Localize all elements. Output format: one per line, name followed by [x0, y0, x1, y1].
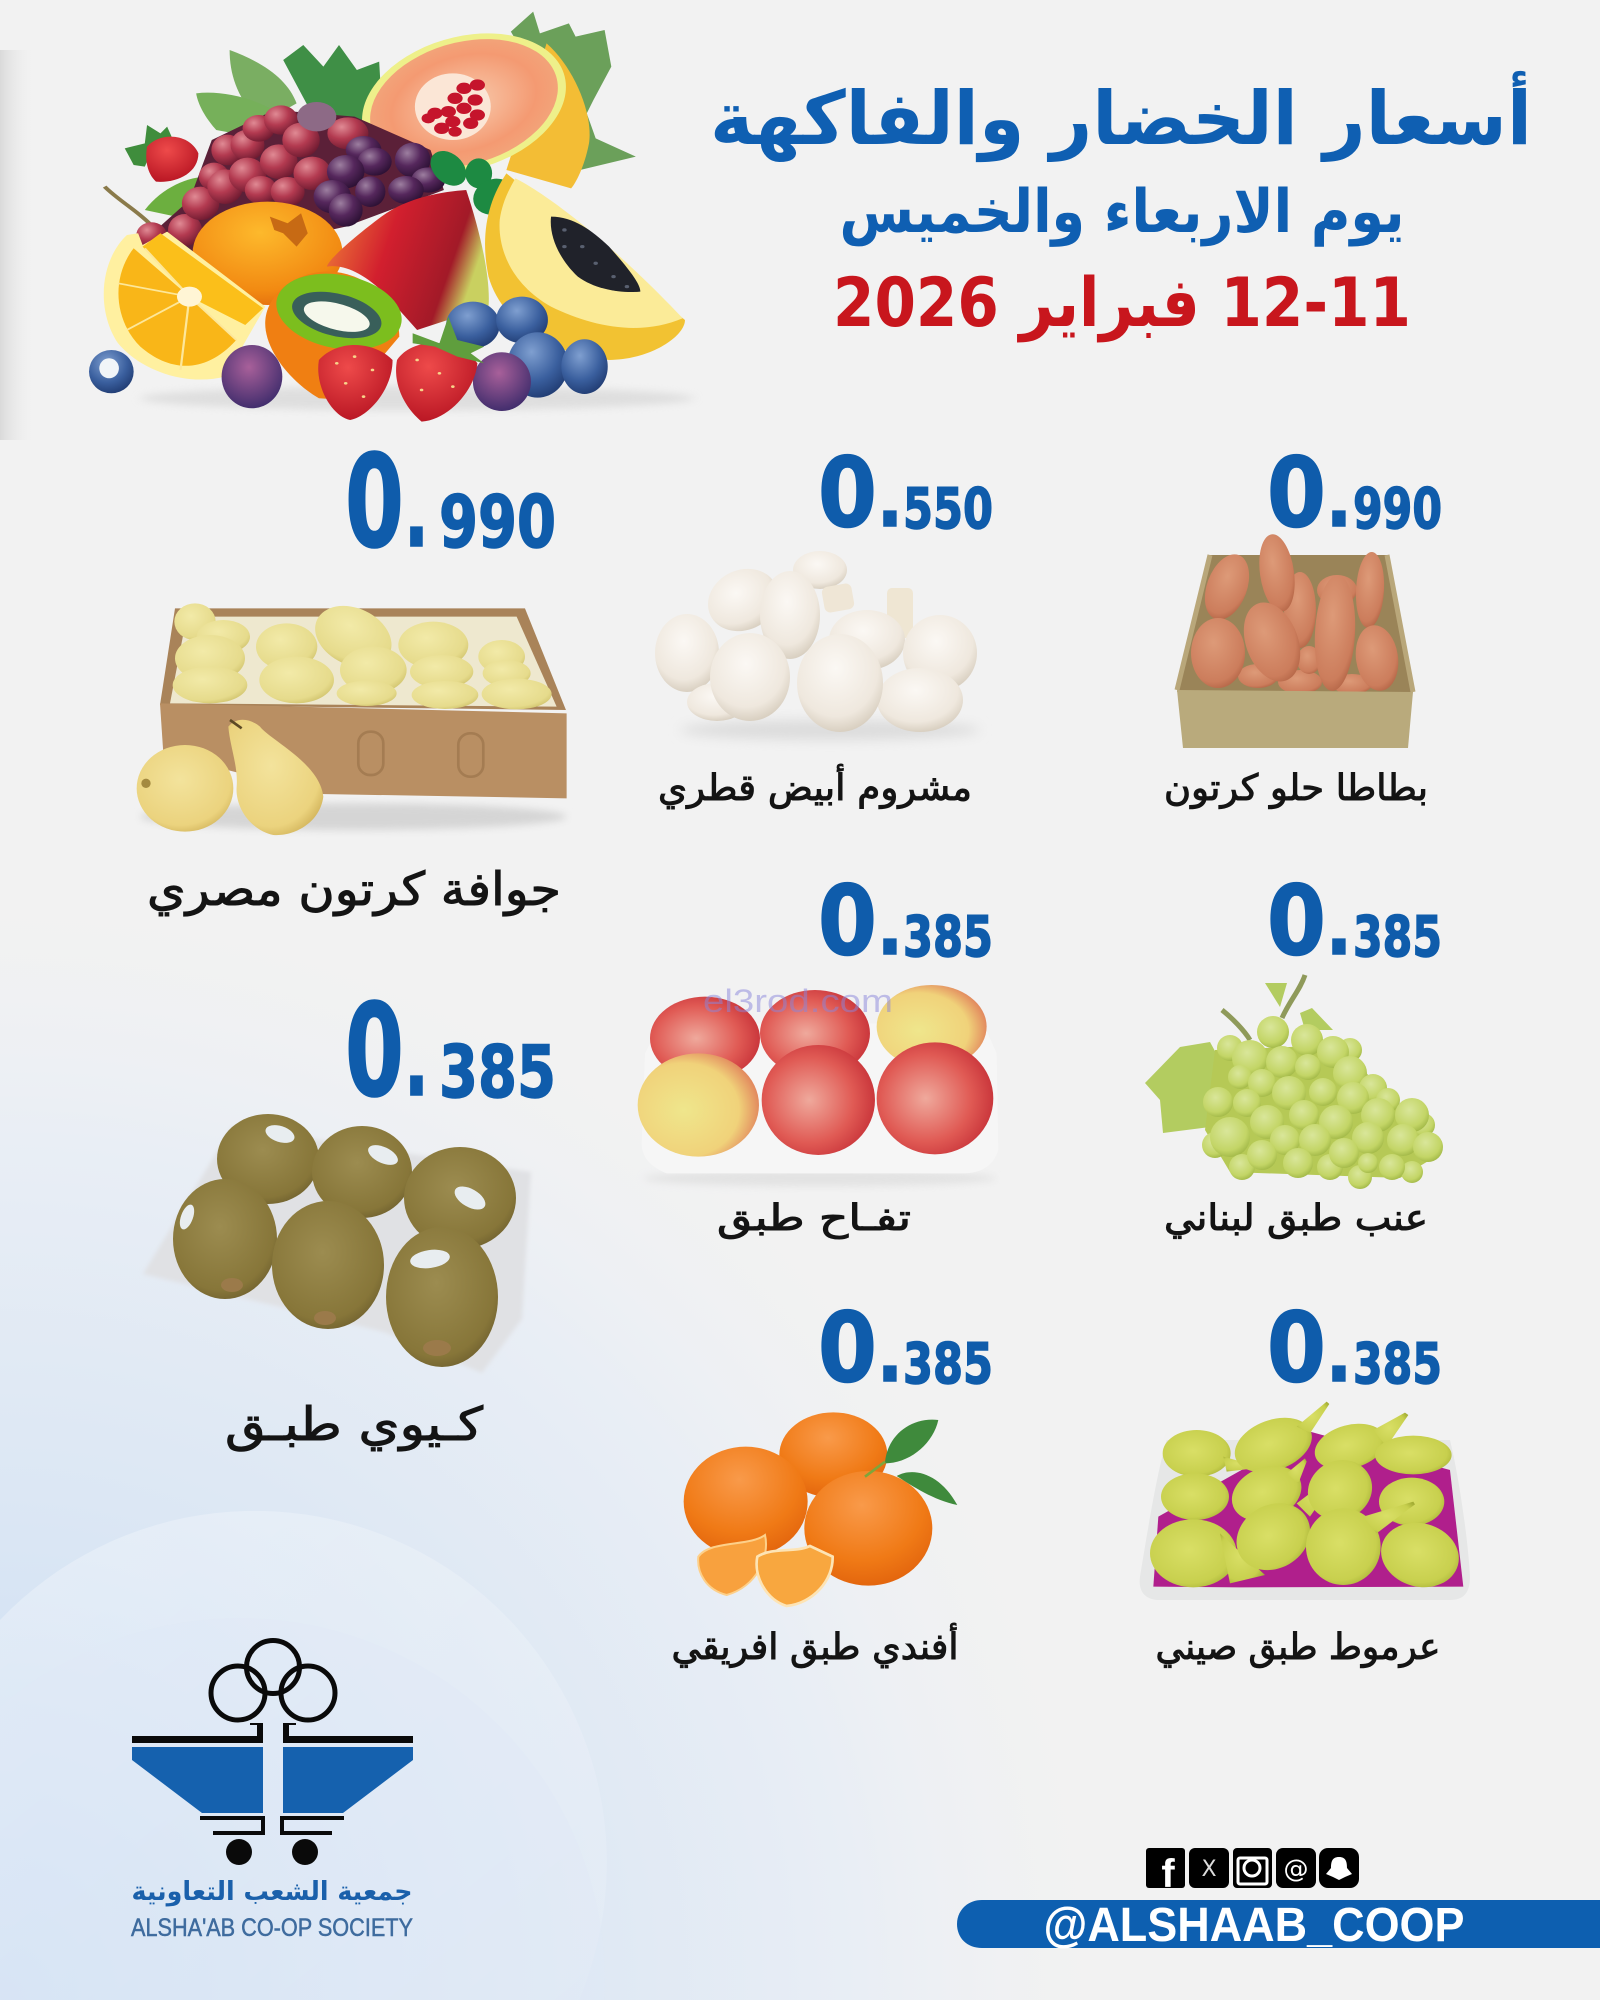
price: 0.385: 0.	[1267, 1292, 1352, 1404]
icon: x: X	[1201, 1857, 1217, 1882]
icon: red pear	[327, 190, 489, 330]
price: 0.385: 385	[439, 1030, 556, 1114]
image: pears on tray	[1140, 1402, 1470, 1600]
icon: mint leaves	[423, 147, 521, 219]
hero fruit illustration	[89, 5, 694, 422]
label: جوافة كرتون مصري	[147, 862, 561, 917]
icon: snapchat	[1319, 1848, 1359, 1888]
icon: shopping cart	[132, 1723, 413, 1865]
label: أفندي طبق افريقي	[672, 1623, 958, 1668]
price: 0.385	[818, 865, 993, 977]
product: apple tray	[638, 865, 998, 1239]
icon: papaya half	[485, 173, 685, 360]
icon: facebook: f	[1161, 1852, 1175, 1896]
product: kiwi tray	[143, 977, 556, 1452]
price: 0.990: 990	[1353, 477, 1442, 542]
image: kiwis on tray	[143, 1114, 531, 1373]
price: 0.385: 0.	[345, 977, 429, 1126]
price: 0.385	[818, 1292, 993, 1404]
price: 0.990: 0.	[345, 428, 429, 577]
price: 0.990: 990	[439, 480, 556, 564]
price: 0.385: 0.	[818, 865, 903, 977]
price: 0.385	[1267, 865, 1442, 977]
title: أسعار الخضار والفاكهة	[710, 70, 1532, 163]
price: 0.990: 0.	[1267, 437, 1352, 549]
label: مشروم أبيض قطري	[658, 764, 972, 809]
price: 0.550	[818, 437, 993, 549]
icon: red and purple grape clusters	[136, 102, 445, 260]
label: كـيوي طبـق	[225, 1397, 483, 1452]
social media icons	[1146, 1848, 1359, 1896]
image: apples on tray	[638, 985, 998, 1186]
icon: blueberries and plums	[89, 297, 608, 411]
icon: grapefruit half	[326, 5, 602, 202]
subtitle: days: يوم الاربعاء والخميس	[840, 177, 1404, 247]
price: 0.385: 0.	[1267, 865, 1352, 977]
product: Egyptian guava carton	[137, 428, 567, 917]
logo: Alshaab co-op society	[131, 1640, 413, 1942]
icon: threads: @	[1284, 1854, 1308, 1883]
image: sweet potatoes in box	[1177, 532, 1413, 748]
price: 0.385	[1267, 1292, 1442, 1404]
label: عرموط طبق صيني	[1156, 1627, 1440, 1668]
icon: three rings	[211, 1640, 335, 1720]
price: 0.385: 0.	[818, 1292, 903, 1404]
price: 0.990	[345, 428, 556, 577]
price: 0.385: 385	[903, 905, 993, 970]
product: Lebanese grapes tray	[1145, 865, 1443, 1239]
label: تفـاح طبق	[717, 1198, 911, 1239]
icon: x	[1189, 1848, 1229, 1888]
product: white mushroom	[655, 437, 993, 809]
image: green grapes	[1145, 975, 1443, 1189]
handle bar: @ALSHAAB_COOP	[1044, 1899, 1464, 1952]
product: Chinese pears tray	[1140, 1292, 1470, 1668]
icon: instagram	[1233, 1848, 1272, 1888]
price: 0.550: 550	[903, 477, 993, 542]
logo Arabic name: جمعية الشعب التعاونية	[132, 1877, 412, 1907]
label: بطاطا حلو كرتون	[1164, 768, 1428, 809]
price: 0.550: 0.	[818, 437, 903, 549]
watermark: el3rod.com	[703, 983, 893, 1019]
image: mushrooms	[655, 551, 980, 740]
icon: strawberries	[318, 317, 484, 422]
label: عنب طبق لبناني	[1164, 1198, 1428, 1239]
icon: strawberry top left	[105, 125, 212, 223]
price: 0.385: 385	[903, 1332, 993, 1397]
icon: leaves behind fruit	[196, 12, 636, 170]
date line: 12-11 فبراير 2026	[833, 264, 1411, 343]
price: 0.990	[1267, 437, 1442, 549]
icon: threads	[1276, 1848, 1316, 1888]
icon: kiwi half	[261, 260, 417, 400]
logo English name: ALSHA'AB CO-OP SOCIETY	[131, 1914, 413, 1942]
product: African mandarin tray	[672, 1292, 993, 1668]
icon: orange	[193, 202, 343, 305]
icon: orange wedge	[104, 232, 265, 380]
icon: facebook	[1146, 1848, 1185, 1896]
handle bar	[957, 1899, 1600, 1952]
price: 0.385: 385	[1353, 1332, 1442, 1397]
image: guavas in box	[137, 594, 567, 835]
price: 0.385	[345, 977, 556, 1126]
price: 0.385: 385	[1353, 905, 1442, 970]
product: sweet potato carton	[1164, 437, 1442, 809]
image: mandarins	[684, 1412, 957, 1606]
